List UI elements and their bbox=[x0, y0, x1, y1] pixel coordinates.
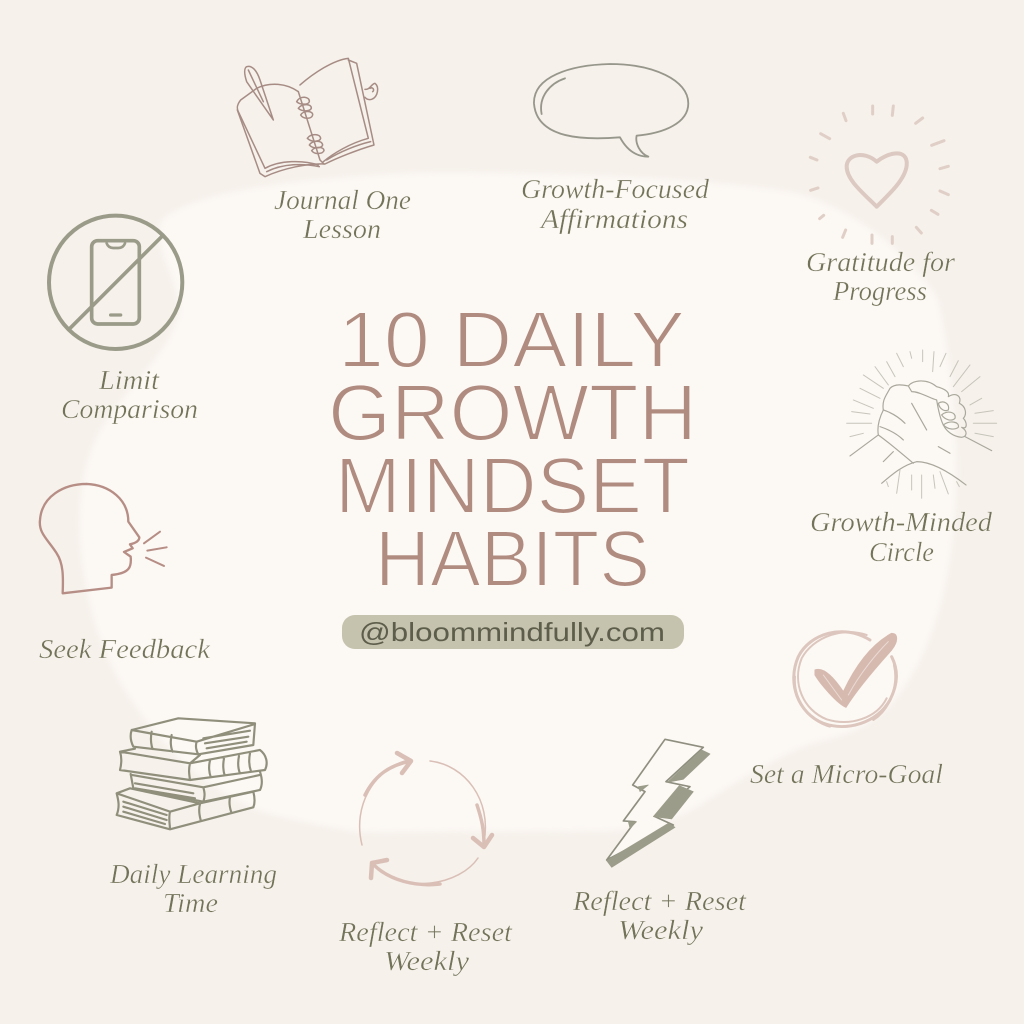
title bbox=[328, 295, 697, 603]
icon: phone with prohibition sign bbox=[49, 216, 182, 349]
title: GROWTH bbox=[328, 368, 697, 457]
icon: speaking head bbox=[40, 484, 167, 593]
title: HABITS bbox=[375, 514, 650, 603]
label: limit comparison: Limit bbox=[98, 365, 161, 395]
label: reflect + reset weekly (left) bbox=[338, 917, 514, 976]
label: gratitude for progress bbox=[806, 247, 955, 306]
label: growth-minded circle bbox=[810, 507, 993, 567]
website pill bbox=[342, 615, 684, 649]
icon: reset cycle arrows bbox=[360, 753, 492, 885]
label: limit comparison: Comparison bbox=[61, 394, 198, 424]
label: growth-minded circle: Growth-Minded bbox=[810, 507, 993, 537]
icon: bookmark tab bbox=[365, 83, 378, 100]
label: daily learning time: Daily Learning bbox=[109, 859, 277, 889]
title: 10 DAILY bbox=[338, 295, 685, 384]
icon: speech bubble bbox=[534, 64, 688, 157]
label: reflect + reset weekly (left): Reflect + Reset bbox=[338, 917, 514, 947]
label: gratitude for progress: Progress bbox=[832, 276, 927, 306]
label: journal one lesson: Lesson bbox=[302, 214, 381, 244]
icon: checkmark in circle bbox=[794, 632, 897, 727]
label: growth-minded circle: Circle bbox=[869, 537, 934, 567]
label: journal one lesson bbox=[274, 185, 411, 244]
label: limit comparison bbox=[61, 365, 198, 424]
icon: lightning bolt bbox=[607, 739, 710, 867]
icon: journal bbox=[237, 58, 378, 177]
title: MINDSET bbox=[335, 441, 690, 530]
label: set a micro-goal: Set a Micro-Goal bbox=[750, 759, 943, 789]
label: growth-focused affirmations: Growth-Focused bbox=[521, 174, 710, 204]
icon: pen bbox=[245, 66, 273, 120]
label: growth-focused affirmations: Affirmations bbox=[539, 204, 688, 234]
label: reflect + reset weekly (left): Weekly bbox=[384, 946, 469, 976]
label: gratitude for progress: Gratitude for bbox=[806, 247, 955, 277]
label: daily learning time: Time bbox=[163, 888, 218, 918]
background blob bbox=[80, 173, 956, 832]
label: seek feedback: Seek Feedback bbox=[39, 634, 211, 664]
icon: stack of books bbox=[117, 718, 267, 829]
website pill: @bloommindfully.com bbox=[359, 617, 665, 647]
label: reflect + reset weekly (right): Reflect + Reset bbox=[572, 886, 748, 916]
label: reflect + reset weekly (right) bbox=[572, 886, 748, 945]
label: growth-focused affirmations bbox=[521, 174, 710, 234]
label: daily learning time bbox=[109, 859, 277, 918]
icon: heart with rays bbox=[810, 106, 948, 243]
icon: handshake with rays bbox=[847, 350, 997, 498]
label: reflect + reset weekly (right): Weekly bbox=[618, 915, 703, 945]
label: journal one lesson: Journal One bbox=[274, 185, 411, 215]
